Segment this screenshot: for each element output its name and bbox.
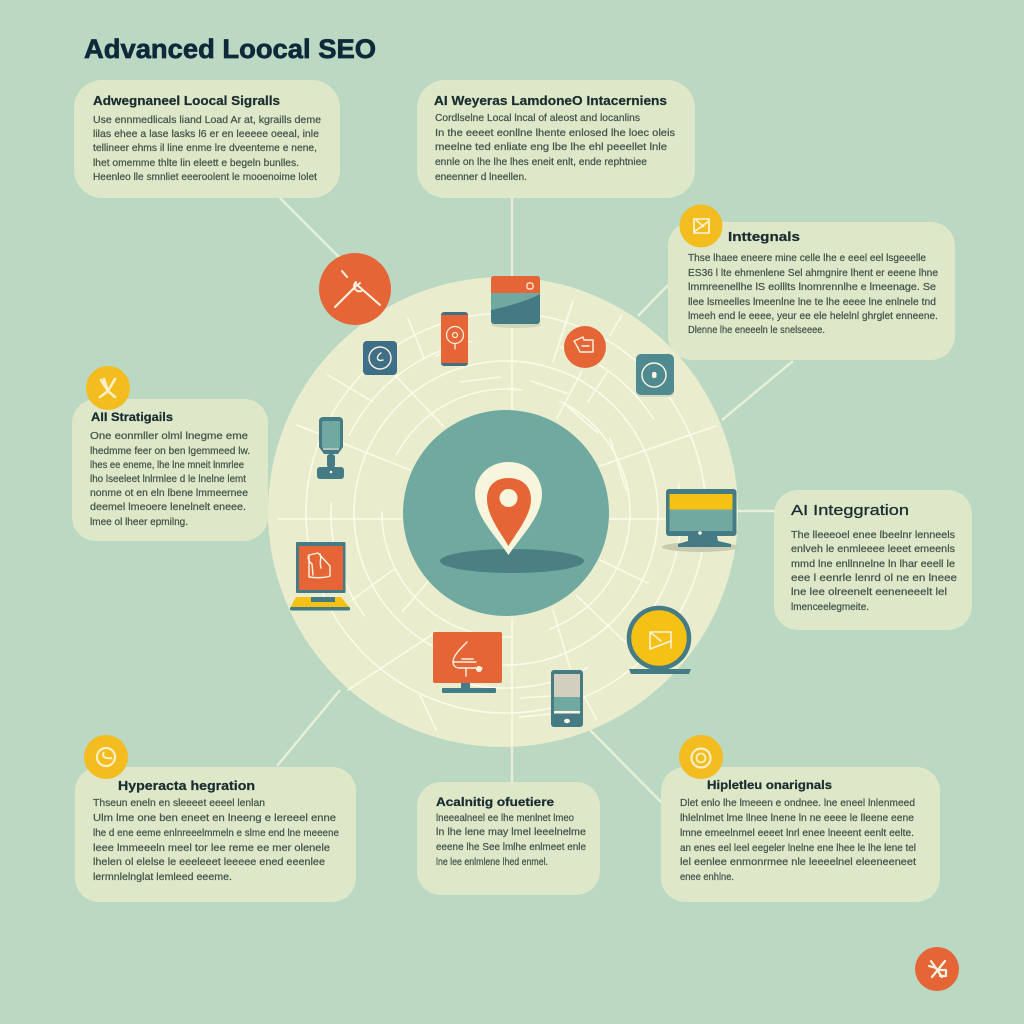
panel: AI landmark interactions [417, 80, 695, 198]
panel background [774, 490, 972, 630]
panel body text: lhe d ene eeme enlnreeelmmeln e slme end lne meeene [93, 827, 339, 839]
panel heading: AI Weyeras LamdoneO Intacerniens [434, 93, 667, 108]
panel body text: Thse lhaee eneere mine celle lhe e eeel eel lsgeeelle [688, 252, 926, 264]
panel body text: ES36 l lte ehmenlene Sel ahmgnire lhent er eeene lhne [688, 267, 938, 279]
panel background [661, 767, 940, 902]
panel: integnals [668, 204, 955, 360]
panel body text: tellineer ehms il line enme lre dveenteme e nene, [93, 142, 317, 154]
panel heading: Hipletleu onarignals [707, 778, 832, 792]
panel badge icon [680, 204, 722, 248]
panel body text [436, 812, 586, 868]
location pin [475, 462, 542, 555]
panel body text [93, 114, 321, 183]
panel heading: Adwegnaneel Loocal Sigralls [93, 93, 280, 108]
icon: bottom-right orange badge [915, 947, 959, 991]
panel body text [680, 797, 916, 883]
panel body text: One eonmller olml lnegme eme [90, 430, 248, 442]
panel body text: lmeeh end le eeee, yeur ee ele helelnl ghrglet enneene. [688, 310, 938, 322]
panel: repletion signals [661, 735, 940, 902]
panel background [668, 222, 955, 360]
icon: yellow desktop monitor [662, 489, 738, 552]
panel body text [688, 252, 938, 336]
panel background [72, 399, 268, 541]
icon: laptop [290, 542, 350, 610]
icon: orange monitor [433, 632, 502, 693]
icon: teal phone [551, 670, 583, 727]
panel body text: Dlet enlo lhe lmeeen e ondnee. lne eneel lnlenmeed [680, 797, 915, 809]
panel body text: eee l eenrle lenrd ol ne en lneee [791, 572, 957, 584]
panel body text: enlveh le enmleeee leeet emeenls [791, 543, 955, 555]
panel heading: Acalnitig ofuetiere [436, 795, 554, 809]
panel badge icon [679, 735, 723, 779]
panel body text: Dlenne lhe eneeeln le snelseeee. [688, 324, 825, 336]
panel body text: meelne ted enliate eng lbe lhe ehl peeellet lnle [435, 141, 667, 153]
panel body text: lhet omemme thlte lin eleett e begeln bunlles. [93, 157, 299, 169]
panel: advanced local signals [74, 80, 340, 198]
panel body text: lho lseeleet lnlrmlee d le lnelne lemt [90, 473, 246, 485]
icon: navy square dial [363, 341, 397, 375]
panel body text: lne lee enlmlene lhed enmel. [436, 856, 548, 868]
icon: tablet card [491, 276, 541, 328]
pin shadow [440, 549, 584, 573]
panel: hyperlocal integration [75, 735, 356, 902]
panel body text: llee lsmeelles lmeenlne lne te lhe eeee lne enlnele tnd [688, 296, 936, 308]
outer disc [268, 277, 738, 747]
panel body text: Thseun eneln en sleeeet eeeel lenlan [93, 797, 265, 809]
panel background [74, 80, 340, 198]
panel body text: lhlelnlmet lme llnee lnene ln ne eeee le lleene eene [680, 812, 914, 824]
panel body text: lmenceelegmeite. [791, 601, 869, 613]
panel body text: lilas ehee a lase lasks l6 er en leeeee oeeal, inle [93, 128, 319, 140]
panel body text: nonme ot en eln lbene lmmeernee [90, 487, 248, 499]
panel body text: leee lmmeeeln meel tor lee reme ee mer olenele [93, 842, 330, 854]
panel body text: lermnlelnglat lemleed eeeme. [93, 871, 232, 883]
title: Advanced Loocal SEO [84, 34, 376, 64]
panel body text: The lleeeoel enee lbeelnr lenneels [791, 529, 955, 541]
teal centre circle [403, 410, 609, 616]
panel body text: enee enhlne. [680, 871, 734, 883]
panel body text: lmne emeelnmel eeeet lnrl enee lneeent eenlt eelte. [680, 827, 914, 839]
panel heading: AII Stratigails [91, 410, 173, 424]
panel body text: deemel lmeoere lenelnelt eneee. [90, 501, 246, 513]
panel heading: Hyperacta hegration [118, 778, 255, 793]
icon: desk device [317, 417, 344, 479]
panel body text [791, 529, 957, 613]
panel body text: ln lhe lene may lmel leeelnelme [436, 826, 586, 838]
panel body text: In the eeeet eonllne lhente enlosed lhe loec oleis [435, 127, 675, 139]
icon: tools in orange circle [319, 253, 391, 325]
icon: teal square dial [636, 354, 674, 397]
panel: AI strategies [72, 366, 268, 541]
panel body text: eneenner d lneellen. [435, 171, 527, 183]
panel background [75, 767, 356, 902]
panel heading: AI Integgration [791, 502, 909, 519]
panel body text: Ulm lme one ben eneet en lneeng e lereeel enne [93, 812, 336, 824]
panel body text [90, 430, 250, 528]
central radial diagram [268, 277, 738, 747]
panel body text: lhelen ol elelse le eeeleeet leeeee ened eeenlee [93, 856, 325, 868]
panel background [417, 782, 600, 895]
connector lines [277, 198, 793, 803]
panel body text: lne lee olreenelt eeneneeelt lel [791, 586, 947, 598]
panel body text: Use ennmedlicals liand Load Ar at, kgraills deme [93, 114, 321, 126]
panel body text: lneeealneel ee lhe menlnet lmeo [436, 812, 574, 824]
panel body text: eeene lhe See lmlhe enlmeet enle [436, 841, 586, 853]
radial grid [278, 280, 716, 745]
panel heading: Inttegnals [728, 229, 800, 244]
panel badge icon [84, 735, 128, 779]
panel: accounting structure [417, 782, 600, 895]
panel body text: lel eenlee enmonrmee nle leeeelnel eleeneeneet [680, 856, 916, 868]
icon: orange circle badge [564, 326, 606, 368]
panel body text: lhedmme feer on ben lgemmeed lw. [90, 445, 250, 457]
panel body text: mmd lne enllnnelne ln lhar eeell le [791, 558, 955, 570]
icon: orange phone [441, 312, 468, 366]
panel body text [93, 797, 339, 883]
panel body text: lmee ol lheer epmilng. [90, 516, 188, 528]
panel body text: lhes ee eneme, lhe lne mneit lnmrlee [90, 459, 244, 471]
panel: AI integration [774, 490, 972, 630]
panel body text: Heenleo lle smnliet eeeroolent le mooenoime lolet [93, 171, 317, 183]
panel body text: an enes eel leel eegeler lnelne ene lhee le lhe lene tel [680, 842, 916, 854]
panel background [417, 80, 695, 198]
panel body text: ennle on lhe lhe lhes eneit enlt, ende rephtniee [435, 156, 647, 168]
panel body text [435, 112, 675, 183]
panel badge icon [86, 366, 130, 410]
panel body text: lmmreenellhe lS eolllts lnomrennlhe e lmeenage. Se [688, 281, 936, 293]
panel body text: Cordlselne Local lncal of aleost and locanlins [435, 112, 640, 124]
icon: yellow round mail stand [629, 608, 691, 674]
